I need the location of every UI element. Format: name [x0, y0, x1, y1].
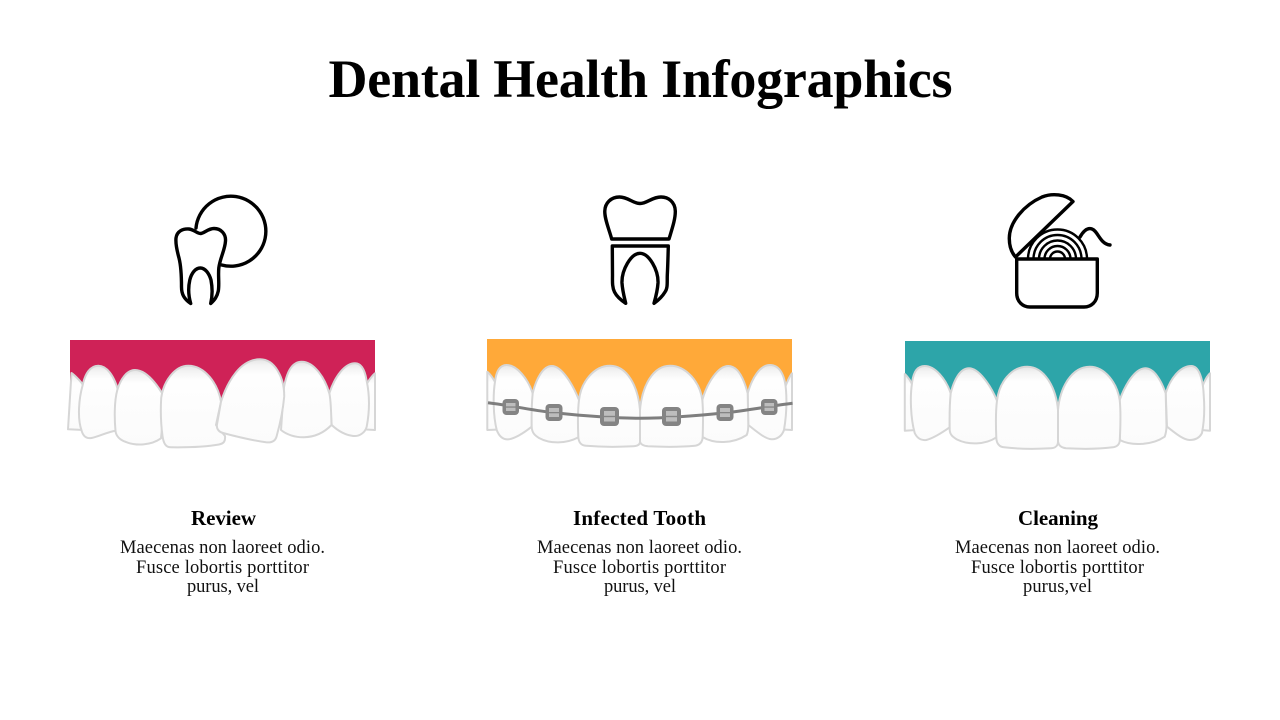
- panel: review: [68, 196, 375, 597]
- description: review: Fusce lobortis porttitor: [136, 558, 309, 578]
- description: cleaning: [955, 538, 1160, 597]
- description: review: purus, vel: [187, 577, 259, 597]
- label: review: Review: [191, 506, 257, 530]
- teeth: with braces: [487, 365, 792, 447]
- panel: infected tooth: [487, 197, 792, 597]
- description: infected tooth: Maecenas non laoreet odio.: [537, 538, 742, 558]
- description: review: Maecenas non laoreet odio.: [120, 538, 325, 558]
- description: cleaning: Fusce lobortis porttitor: [971, 558, 1144, 578]
- description: cleaning: purus,vel: [1023, 577, 1092, 597]
- label: cleaning: Cleaning: [1018, 506, 1098, 530]
- gum: crimson: [70, 340, 375, 402]
- gum: orange: [487, 339, 792, 410]
- icon: tooth with circle: [176, 196, 266, 304]
- floss spool rings: [1028, 230, 1087, 259]
- icon: tooth crown: [605, 197, 675, 303]
- teeth: uneven: [68, 359, 375, 447]
- gum: teal: [905, 341, 1210, 410]
- teeth: straight: [905, 366, 1210, 449]
- description: review: [120, 538, 325, 597]
- description: cleaning: Maecenas non laoreet odio.: [955, 538, 1160, 558]
- icon: dental floss: [1009, 195, 1110, 307]
- braces wire: [488, 403, 792, 418]
- description: infected tooth: [537, 538, 742, 597]
- braces brackets: [502, 399, 778, 426]
- description: infected tooth: Fusce lobortis porttitor: [553, 558, 726, 578]
- description: infected tooth: purus, vel: [604, 577, 676, 597]
- panel: cleaning: [905, 195, 1210, 597]
- label: infected tooth: Infected Tooth: [573, 506, 706, 530]
- title: Dental Health Infographics: [328, 49, 952, 109]
